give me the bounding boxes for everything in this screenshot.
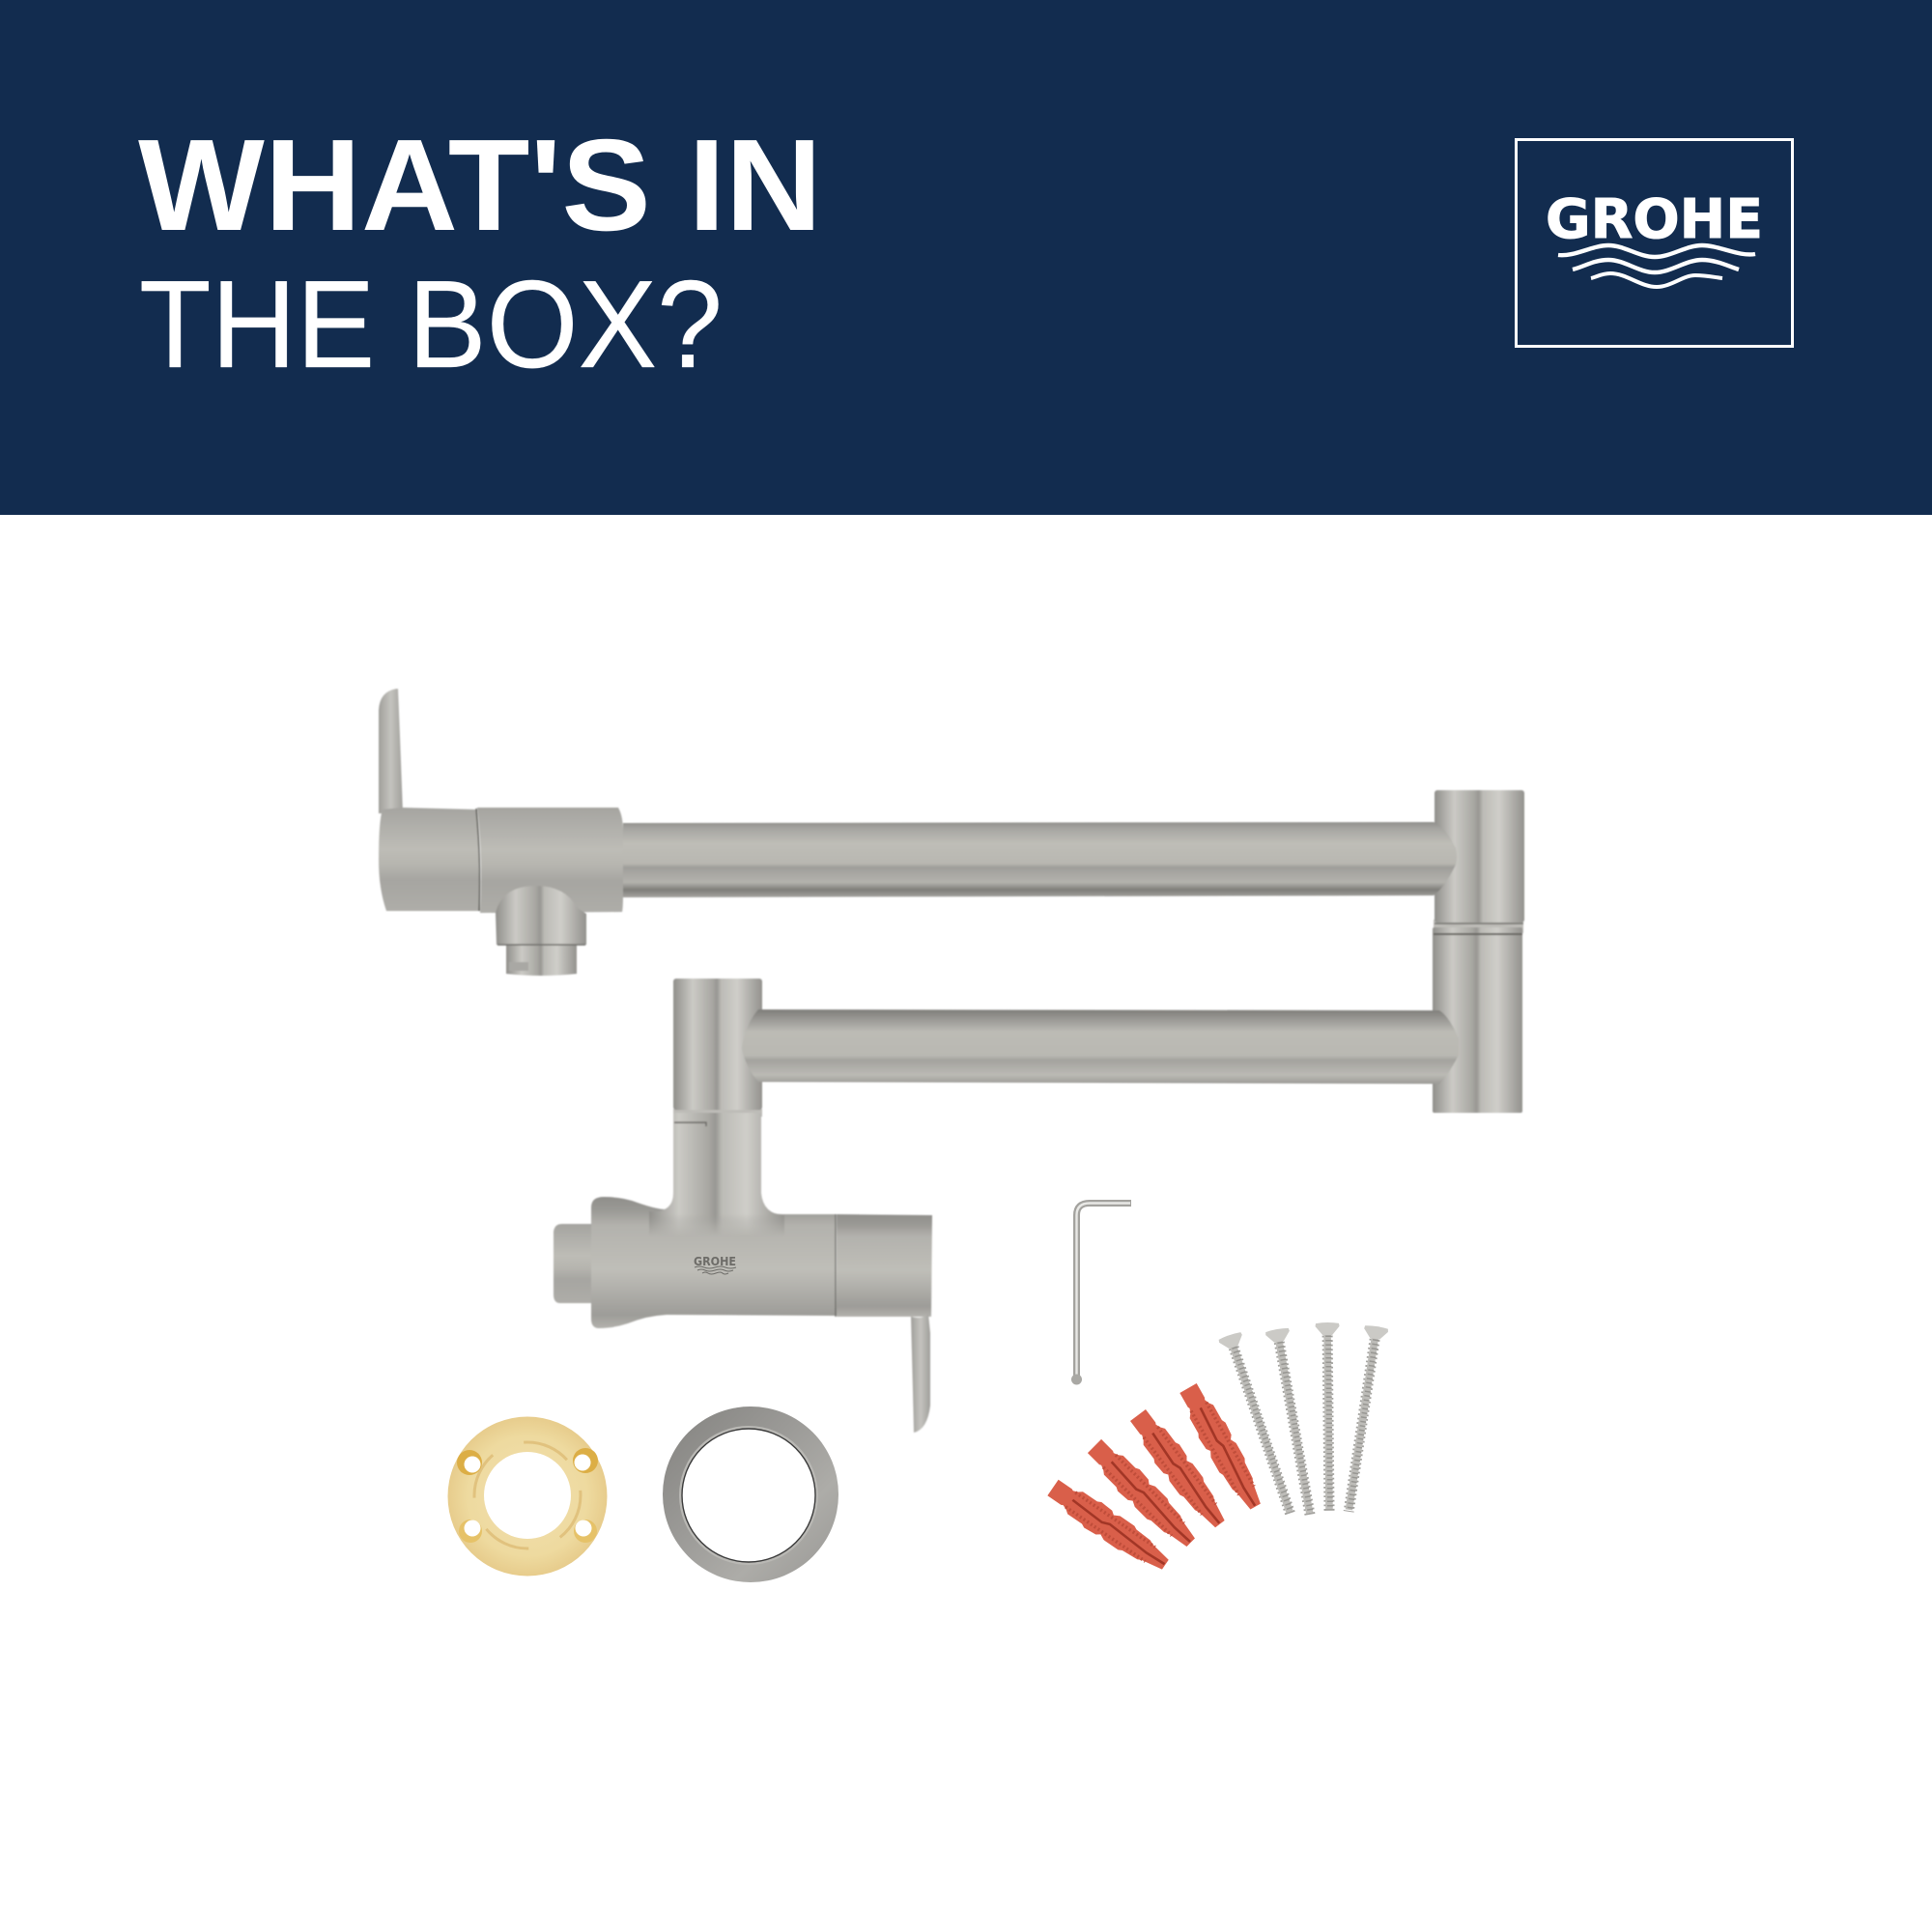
GROHE logo: [1517, 139, 1793, 346]
wall body: [591, 1197, 837, 1328]
screw 1: [1218, 1331, 1301, 1518]
faucet assembly: [379, 689, 1524, 1433]
screw 4: [1337, 1324, 1389, 1514]
right lower swivel: [1433, 927, 1522, 1113]
upper handle lever: [379, 689, 403, 813]
handle joint: [476, 809, 480, 911]
wall neck: [649, 1113, 784, 1236]
title: what's in the box: [138, 112, 822, 394]
lower long arm: [742, 1009, 1459, 1084]
upper handle body: [379, 808, 480, 911]
lower lever: [911, 1314, 930, 1433]
nozzle seam: [497, 944, 585, 946]
wall anchor 2: [1084, 1435, 1202, 1553]
screw 2: [1265, 1327, 1321, 1517]
small engraved logo: GROHE: [694, 1254, 736, 1268]
title: what's in the box: THE BOX?: [139, 255, 723, 394]
lower left swivel: [673, 979, 762, 1110]
end cap joint: [835, 1214, 837, 1317]
aerator nozzle: [506, 945, 577, 976]
aerator tab: [509, 962, 528, 971]
screw 3: [1315, 1322, 1342, 1511]
upper mixer housing: [477, 808, 623, 913]
hex key: [1071, 1204, 1131, 1385]
small engraved logo: [694, 1254, 736, 1274]
brass mounting plate: [448, 1416, 607, 1577]
steel escutcheon ring: [663, 1406, 838, 1582]
title: what's in the box: WHAT'S IN: [138, 112, 822, 258]
right upper swivel: [1435, 790, 1524, 923]
upper long arm: [623, 822, 1457, 897]
swivel collar: [1434, 920, 1523, 933]
wall anchor 1: [1044, 1475, 1174, 1577]
adapter knob: [554, 1224, 591, 1303]
wall end cap: [837, 1214, 932, 1317]
spout stub: [496, 886, 586, 945]
GROHE logo: GROHE: [1546, 188, 1763, 251]
swivel ring: [1434, 933, 1522, 935]
swivel seam: [1435, 923, 1523, 924]
neck collar: [673, 1109, 762, 1117]
neck notch: [674, 1122, 706, 1126]
wall anchor 3: [1125, 1406, 1233, 1533]
header banner: [0, 0, 1932, 515]
wall anchor 4: [1175, 1380, 1269, 1515]
